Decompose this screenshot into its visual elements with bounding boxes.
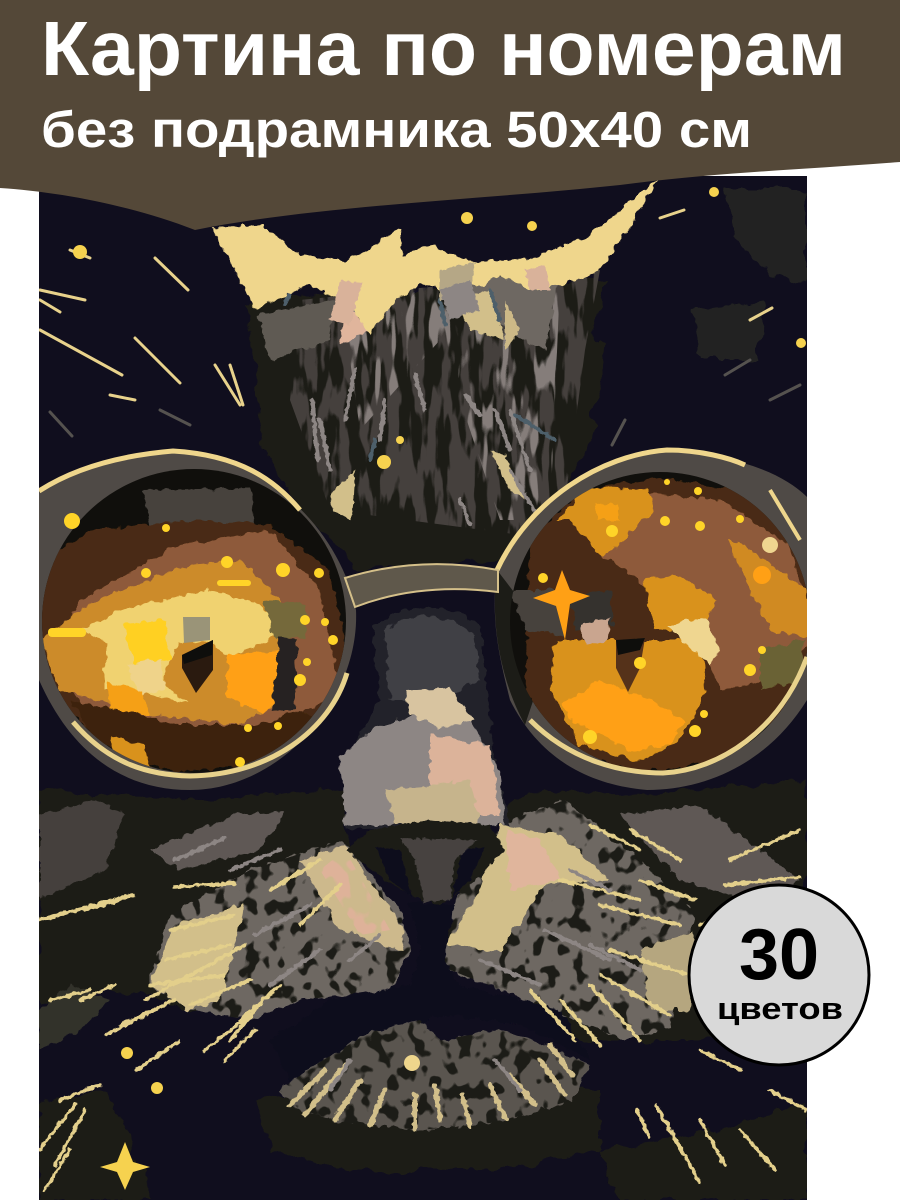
nose bridge	[340, 608, 510, 830]
lower face: cheeks	[39, 780, 807, 1200]
ear tufts: tan band	[213, 178, 660, 335]
header banner	[0, 0, 900, 230]
title: Картина по номерам	[41, 6, 846, 92]
right lens	[495, 450, 825, 790]
chin	[279, 1020, 590, 1130]
gold paint dots	[73, 187, 806, 1190]
badge: 30 colours	[689, 885, 869, 1065]
splashes in the background	[40, 210, 772, 405]
philtrum and mouth	[352, 905, 575, 1040]
tan band pink accents	[330, 262, 550, 350]
upper cheek grey patches	[39, 800, 800, 1050]
muzzle right	[443, 800, 695, 1040]
cat forehead fur	[245, 270, 610, 570]
cat nose	[346, 820, 505, 905]
badge: 30 colours: 30	[739, 915, 819, 995]
left lens	[30, 450, 360, 790]
fur streaks on muzzle	[39, 825, 806, 1190]
dark space blotches	[692, 190, 807, 360]
painting: cat in round glasses	[30, 176, 825, 1200]
glasses bridge	[345, 564, 498, 607]
badge: 30 colours: цветов	[717, 991, 843, 1026]
muzzle left	[148, 840, 412, 1020]
subtitle: без подрамника 50х40 см	[41, 101, 752, 158]
